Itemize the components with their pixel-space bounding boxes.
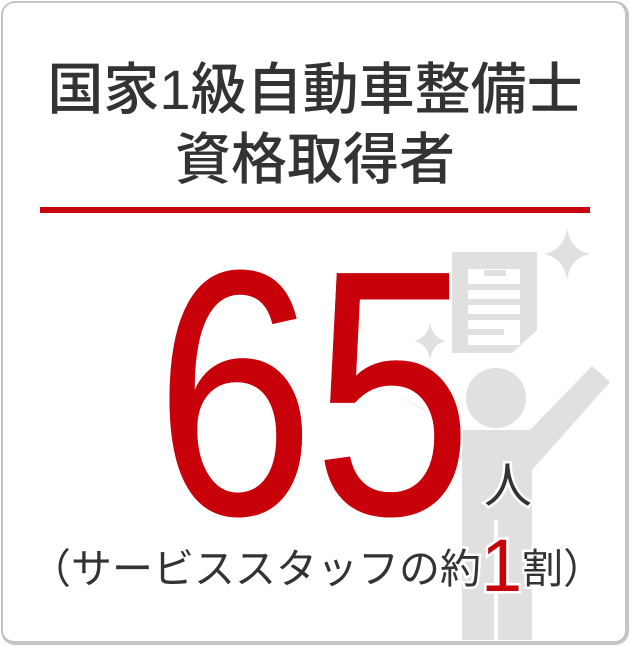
unit 人: 人 xyxy=(484,460,532,513)
title xyxy=(47,58,583,191)
subtitle: （サービススタッフの約1割） xyxy=(30,524,604,607)
icon: person xyxy=(392,366,610,640)
icon: sparkle large xyxy=(544,228,590,280)
icon: document xyxy=(452,252,537,353)
title: 国家1級自動車整備士 xyxy=(47,58,583,121)
title: 資格取得者 xyxy=(175,128,455,191)
number 65: 65 xyxy=(155,198,471,589)
icon: sparkle small xyxy=(414,322,446,360)
red divider xyxy=(40,207,590,213)
